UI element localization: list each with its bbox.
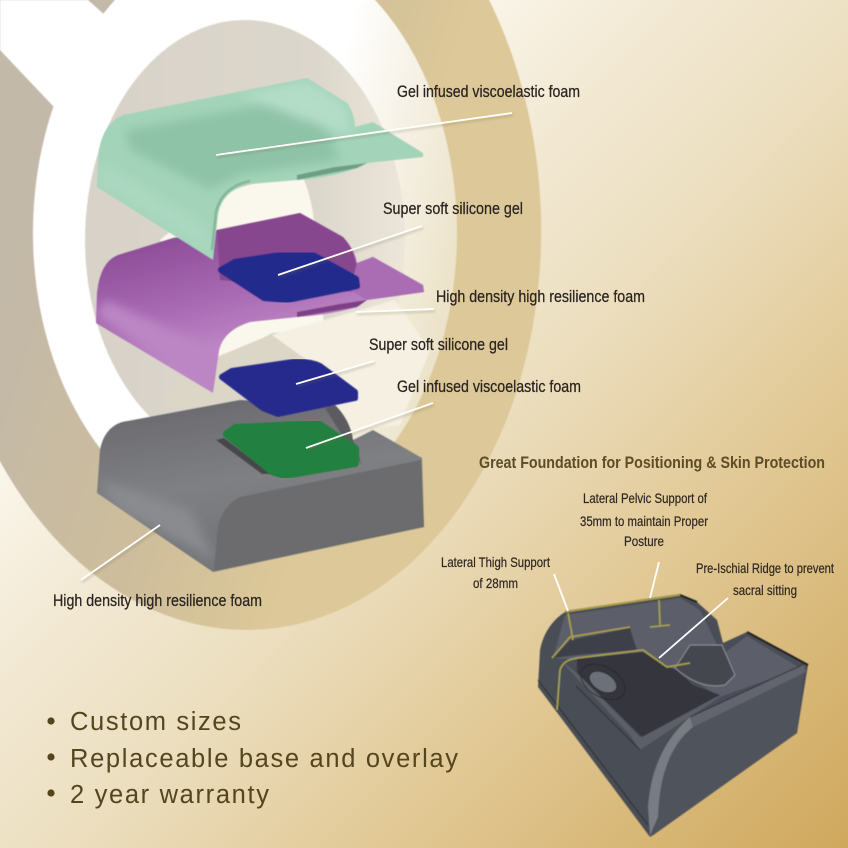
background ring emblem	[0, 0, 555, 640]
label: gel infused foam lower: Gel infused viscoelastic foam	[397, 377, 581, 396]
cream right side of disc	[272, 300, 430, 430]
cushion silhouette	[538, 595, 808, 837]
layer: lower blue silicone gel pad	[222, 362, 355, 414]
leader line soft shadows	[82, 115, 513, 582]
label: lateral thigh support: of 28mm	[473, 575, 518, 591]
leader lines for layers	[81, 113, 512, 580]
tan outer ring	[0, 0, 555, 640]
thigh pad circle detail	[575, 657, 631, 707]
purple flange	[350, 257, 424, 300]
leader: upper gel	[278, 226, 422, 275]
ridge dark band	[553, 628, 637, 658]
jagged dark top edges	[565, 595, 808, 665]
leader: green foam	[306, 403, 433, 448]
layer labels	[53, 82, 645, 610]
label: pre-ischial ridge: sacral sitting	[733, 582, 797, 598]
yellow measurement lines	[552, 595, 690, 710]
label: high density foam middle: High density high resilience foam	[436, 287, 645, 306]
leader: thigh support	[554, 574, 568, 611]
small cushion illustration	[538, 595, 808, 837]
inner back wall	[553, 598, 800, 697]
base silhouette	[97, 400, 424, 572]
purple back wall	[217, 213, 357, 292]
right wall rim	[690, 664, 806, 727]
leader: teal foam	[216, 113, 512, 155]
leader: ischial ridge	[659, 598, 728, 658]
label: super soft gel lower: Super soft silicone gel	[369, 335, 508, 354]
purple shading	[97, 298, 185, 350]
layer: teal gel infused viscoelastic foam	[97, 78, 423, 260]
cushion right face	[652, 672, 804, 836]
white inner field	[32, 0, 458, 450]
left rim	[560, 660, 720, 750]
label: pre-ischial ridge	[696, 560, 834, 598]
label: lateral pelvic support: 35mm to maintain Proper	[580, 513, 708, 529]
layer: upper blue silicone gel pad	[221, 255, 357, 300]
white diagonal band	[0, 0, 104, 106]
base recess left sliver	[216, 438, 272, 474]
purple silhouette	[96, 213, 424, 393]
callout labels for small cushion	[441, 490, 834, 598]
teal silhouette	[97, 78, 423, 260]
teal under lip	[297, 163, 367, 180]
label: lateral thigh support	[441, 554, 550, 591]
layer: grey base cushion	[97, 400, 424, 572]
leader: pelvic support	[650, 562, 659, 598]
label: gel infused foam top: Gel infused viscoelastic foam	[397, 82, 580, 101]
leader: purple foam	[356, 309, 434, 312]
grey diamond under purple layer	[217, 338, 262, 364]
cushion front bevel	[648, 717, 693, 836]
base shading	[109, 486, 210, 555]
purple under lip	[297, 300, 367, 317]
grey inner disc	[85, 20, 405, 460]
cream window inside disc	[160, 170, 325, 365]
label: lateral pelvic support: Lateral Pelvic Support of	[583, 490, 707, 506]
notch curve	[675, 645, 735, 686]
cushion edge lines	[538, 664, 804, 825]
label: lateral pelvic support: Posture	[624, 533, 664, 549]
feature bullet list	[47, 708, 458, 809]
base front face	[214, 460, 424, 571]
teal inner curve edge	[212, 181, 250, 250]
bullet: replaceable: Replaceable base and overlay	[70, 745, 458, 773]
leader: grey foam	[81, 525, 160, 580]
leader: lower gel	[296, 361, 374, 384]
teal shading	[126, 84, 349, 189]
leader lines for small cushion	[554, 562, 728, 658]
bullet: custom sizes: Custom sizes	[70, 708, 241, 736]
base right inner wall	[325, 405, 362, 465]
label: lateral pelvic support	[580, 490, 708, 549]
seat floor	[577, 652, 720, 737]
bullet: warranty: 2 year warranty	[70, 781, 269, 809]
label: lateral thigh support: Lateral Thigh Support	[441, 554, 550, 570]
label: high density foam bottom: High density high resilience foam	[53, 591, 262, 610]
label: super soft gel upper: Super soft silicone gel	[383, 199, 523, 218]
layer: green gel viscoelastic pad	[227, 424, 355, 475]
layer: purple high resilience foam	[96, 213, 424, 393]
